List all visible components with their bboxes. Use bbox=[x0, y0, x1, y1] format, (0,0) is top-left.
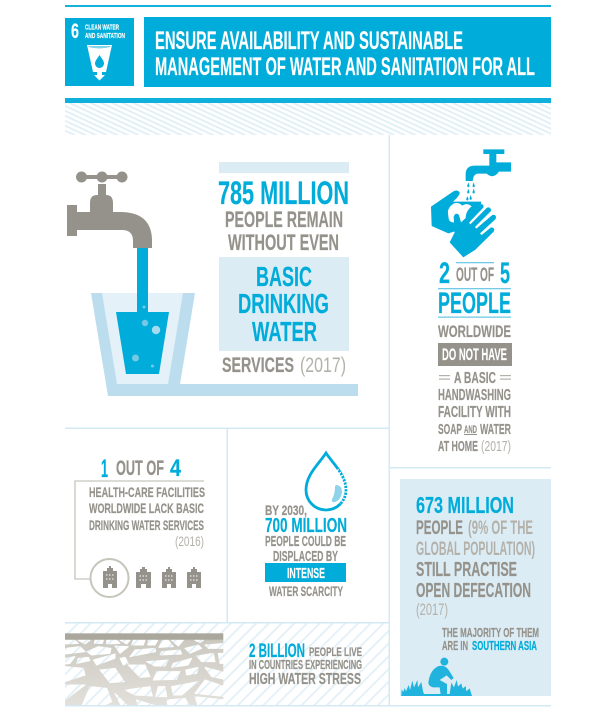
grass bbox=[401, 680, 472, 696]
cracked earth bbox=[65, 633, 223, 705]
panel: 700 million bbox=[265, 453, 347, 599]
do not have box: DO NOT HAVE bbox=[442, 345, 507, 364]
text: DISPLACED BY bbox=[273, 549, 338, 565]
icon: hands under tap bbox=[431, 149, 511, 257]
goal name: AND SANITATION bbox=[85, 31, 125, 40]
intense box bbox=[265, 563, 346, 582]
water stream bbox=[137, 248, 148, 314]
ratio heading: PEOPLE bbox=[438, 287, 511, 320]
body text bbox=[89, 484, 205, 549]
body text: DRINKING WATER SERVICES bbox=[89, 517, 204, 533]
icon: crouching person in grass bbox=[401, 658, 472, 696]
bubbles bbox=[132, 306, 160, 368]
hatched band bbox=[65, 103, 551, 135]
body text: WITHOUT EVEN bbox=[228, 230, 339, 255]
header divider bbox=[65, 98, 551, 103]
rear hand bbox=[431, 190, 481, 233]
panel: handwashing bbox=[431, 149, 512, 455]
panel: open defecation bbox=[400, 479, 551, 696]
handwashing text: FACILITY WITH bbox=[438, 404, 511, 421]
body text bbox=[225, 207, 343, 255]
handwashing text: WATER bbox=[480, 421, 511, 438]
ratio heading: 5 bbox=[500, 257, 510, 290]
icon: highlight circle bbox=[90, 559, 128, 597]
top band bbox=[219, 162, 349, 173]
text: 2 BILLION bbox=[249, 641, 305, 662]
goal badge bbox=[65, 18, 134, 86]
ratio heading: 2 bbox=[439, 257, 450, 290]
handwashing text: AT HOME bbox=[438, 438, 478, 455]
body text: (2017) bbox=[416, 600, 448, 619]
body text: (9% OF THE bbox=[468, 518, 533, 539]
ratio heading: OUT OF bbox=[456, 265, 494, 286]
handwashing text bbox=[438, 370, 511, 455]
glass bbox=[91, 293, 195, 396]
services text: (2017) bbox=[300, 353, 346, 377]
highlight box bbox=[219, 257, 349, 351]
panel: health-care facilities bbox=[75, 455, 205, 597]
highlight box: DRINKING bbox=[238, 288, 329, 319]
connector bbox=[75, 481, 204, 579]
text: BY 2030, bbox=[265, 502, 307, 518]
text: IN COUNTRIES EXPERIENCING bbox=[249, 658, 362, 672]
services text: SERVICES bbox=[222, 353, 294, 377]
icon: buildings bbox=[103, 566, 201, 588]
drops bbox=[466, 182, 475, 200]
soap bbox=[448, 203, 472, 223]
handwashing text: AND bbox=[464, 424, 477, 436]
body text bbox=[416, 518, 535, 619]
tap bbox=[67, 172, 152, 248]
panel: 785 million bbox=[67, 162, 358, 396]
water in glass bbox=[116, 312, 169, 374]
text bbox=[249, 641, 362, 688]
water scarcity: WATER SCARCITY bbox=[269, 583, 343, 599]
icon: water drop bbox=[306, 453, 346, 510]
handwashing text: A BASIC bbox=[454, 370, 496, 387]
body text: PEOPLE REMAIN bbox=[225, 207, 343, 232]
highlight box: BASIC bbox=[256, 261, 312, 292]
headline: 673 MILLION bbox=[416, 492, 514, 518]
body text: PEOPLE bbox=[416, 518, 463, 539]
top rule bbox=[65, 5, 551, 7]
ratio heading bbox=[101, 455, 182, 483]
ratio heading: 1 bbox=[101, 455, 108, 483]
ratio heading bbox=[438, 257, 511, 320]
intense box: INTENSE bbox=[287, 566, 325, 582]
title banner bbox=[144, 17, 551, 87]
ratio heading: OUT OF bbox=[116, 457, 164, 480]
majority note: SOUTHERN ASIA bbox=[472, 638, 537, 653]
goal number: 6 bbox=[71, 20, 79, 43]
body bbox=[428, 666, 454, 695]
handwashing text: (2017) bbox=[481, 438, 511, 455]
text: 700 MILLION bbox=[265, 515, 347, 537]
panel dividers bbox=[65, 135, 551, 706]
head bbox=[440, 658, 448, 666]
text: PEOPLE LIVE bbox=[309, 645, 362, 659]
headline: 785 MILLION bbox=[218, 175, 349, 211]
front hand bbox=[450, 204, 496, 257]
tap bbox=[466, 149, 511, 181]
body text: HEALTH-CARE FACILITIES bbox=[89, 484, 205, 500]
goal name: CLEAN WATER bbox=[85, 22, 119, 32]
text: HIGH WATER STRESS bbox=[249, 671, 361, 688]
handwashing text: HANDWASHING bbox=[438, 387, 511, 404]
shelf bbox=[108, 384, 358, 396]
text: PEOPLE COULD BE bbox=[265, 534, 346, 550]
majority note: ARE IN bbox=[442, 638, 468, 653]
panel: water stress bbox=[65, 622, 388, 705]
ratio heading: 4 bbox=[170, 455, 182, 482]
icon: glass with drop bbox=[87, 45, 112, 80]
body text: WORLDWIDE LACK BASIC bbox=[89, 500, 204, 516]
body text: STILL PRACTISE bbox=[416, 559, 517, 581]
body text: (2016) bbox=[175, 533, 204, 549]
handwashing text: SOAP bbox=[438, 421, 462, 438]
majority note bbox=[442, 625, 539, 653]
do not have box bbox=[438, 343, 512, 366]
text bbox=[265, 502, 347, 565]
goal name bbox=[85, 22, 125, 40]
highlight box: WATER bbox=[252, 316, 317, 347]
icon: tap filling glass bbox=[67, 172, 358, 396]
worldwide: WORLDWIDE bbox=[438, 322, 511, 341]
